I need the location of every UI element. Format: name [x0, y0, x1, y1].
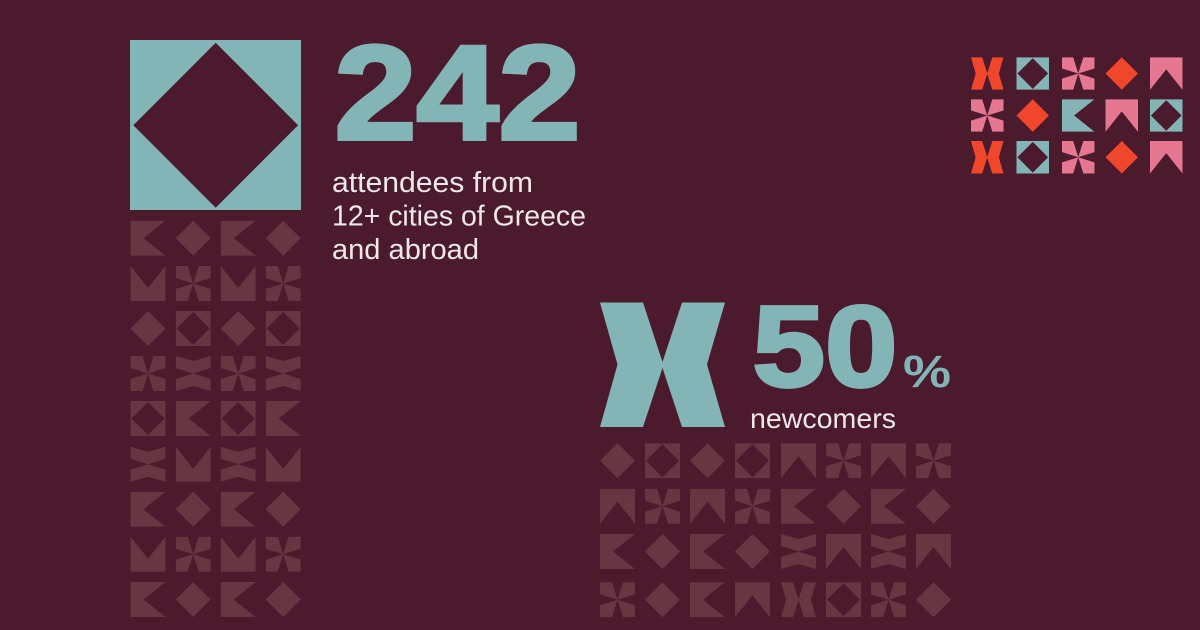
pattern: coloured logo grid, top right	[971, 57, 1182, 173]
pattern: faded grid under the 50% stat	[600, 443, 951, 617]
pattern row 3	[600, 534, 951, 569]
pattern row 2	[130, 266, 301, 301]
pattern row 8	[130, 537, 301, 572]
pattern row 6	[130, 447, 301, 482]
number: 50: 50	[752, 283, 898, 411]
pattern row 4	[600, 582, 951, 617]
text: attendees description	[332, 167, 586, 266]
text: attendees description: 12+ cities of Greece	[332, 200, 586, 232]
pattern row 9	[130, 582, 301, 617]
pattern row 1	[130, 221, 301, 256]
pattern: faded column under the large square	[130, 221, 301, 617]
stat: 50% newcomers	[750, 283, 951, 434]
logo row 2	[971, 99, 1182, 132]
pattern row 4	[130, 356, 301, 391]
icon: large hourglass X shape	[600, 302, 725, 427]
pattern row 1	[600, 443, 951, 478]
stat: 242 attendees	[332, 19, 586, 266]
logo row 3	[971, 141, 1182, 174]
icon: large square with diamond cut-out	[130, 40, 301, 210]
percent sign: %	[903, 346, 951, 397]
text: newcomers: newcomers	[750, 403, 896, 434]
pattern row 7	[130, 492, 301, 527]
logo row 1	[971, 57, 1182, 90]
number: 242: 242	[334, 19, 580, 168]
text: attendees description: attendees from	[332, 167, 533, 199]
pattern row 3	[130, 311, 301, 346]
text: attendees description: and abroad	[332, 234, 479, 266]
pattern row 2	[600, 489, 951, 524]
pattern row 5	[130, 401, 301, 436]
